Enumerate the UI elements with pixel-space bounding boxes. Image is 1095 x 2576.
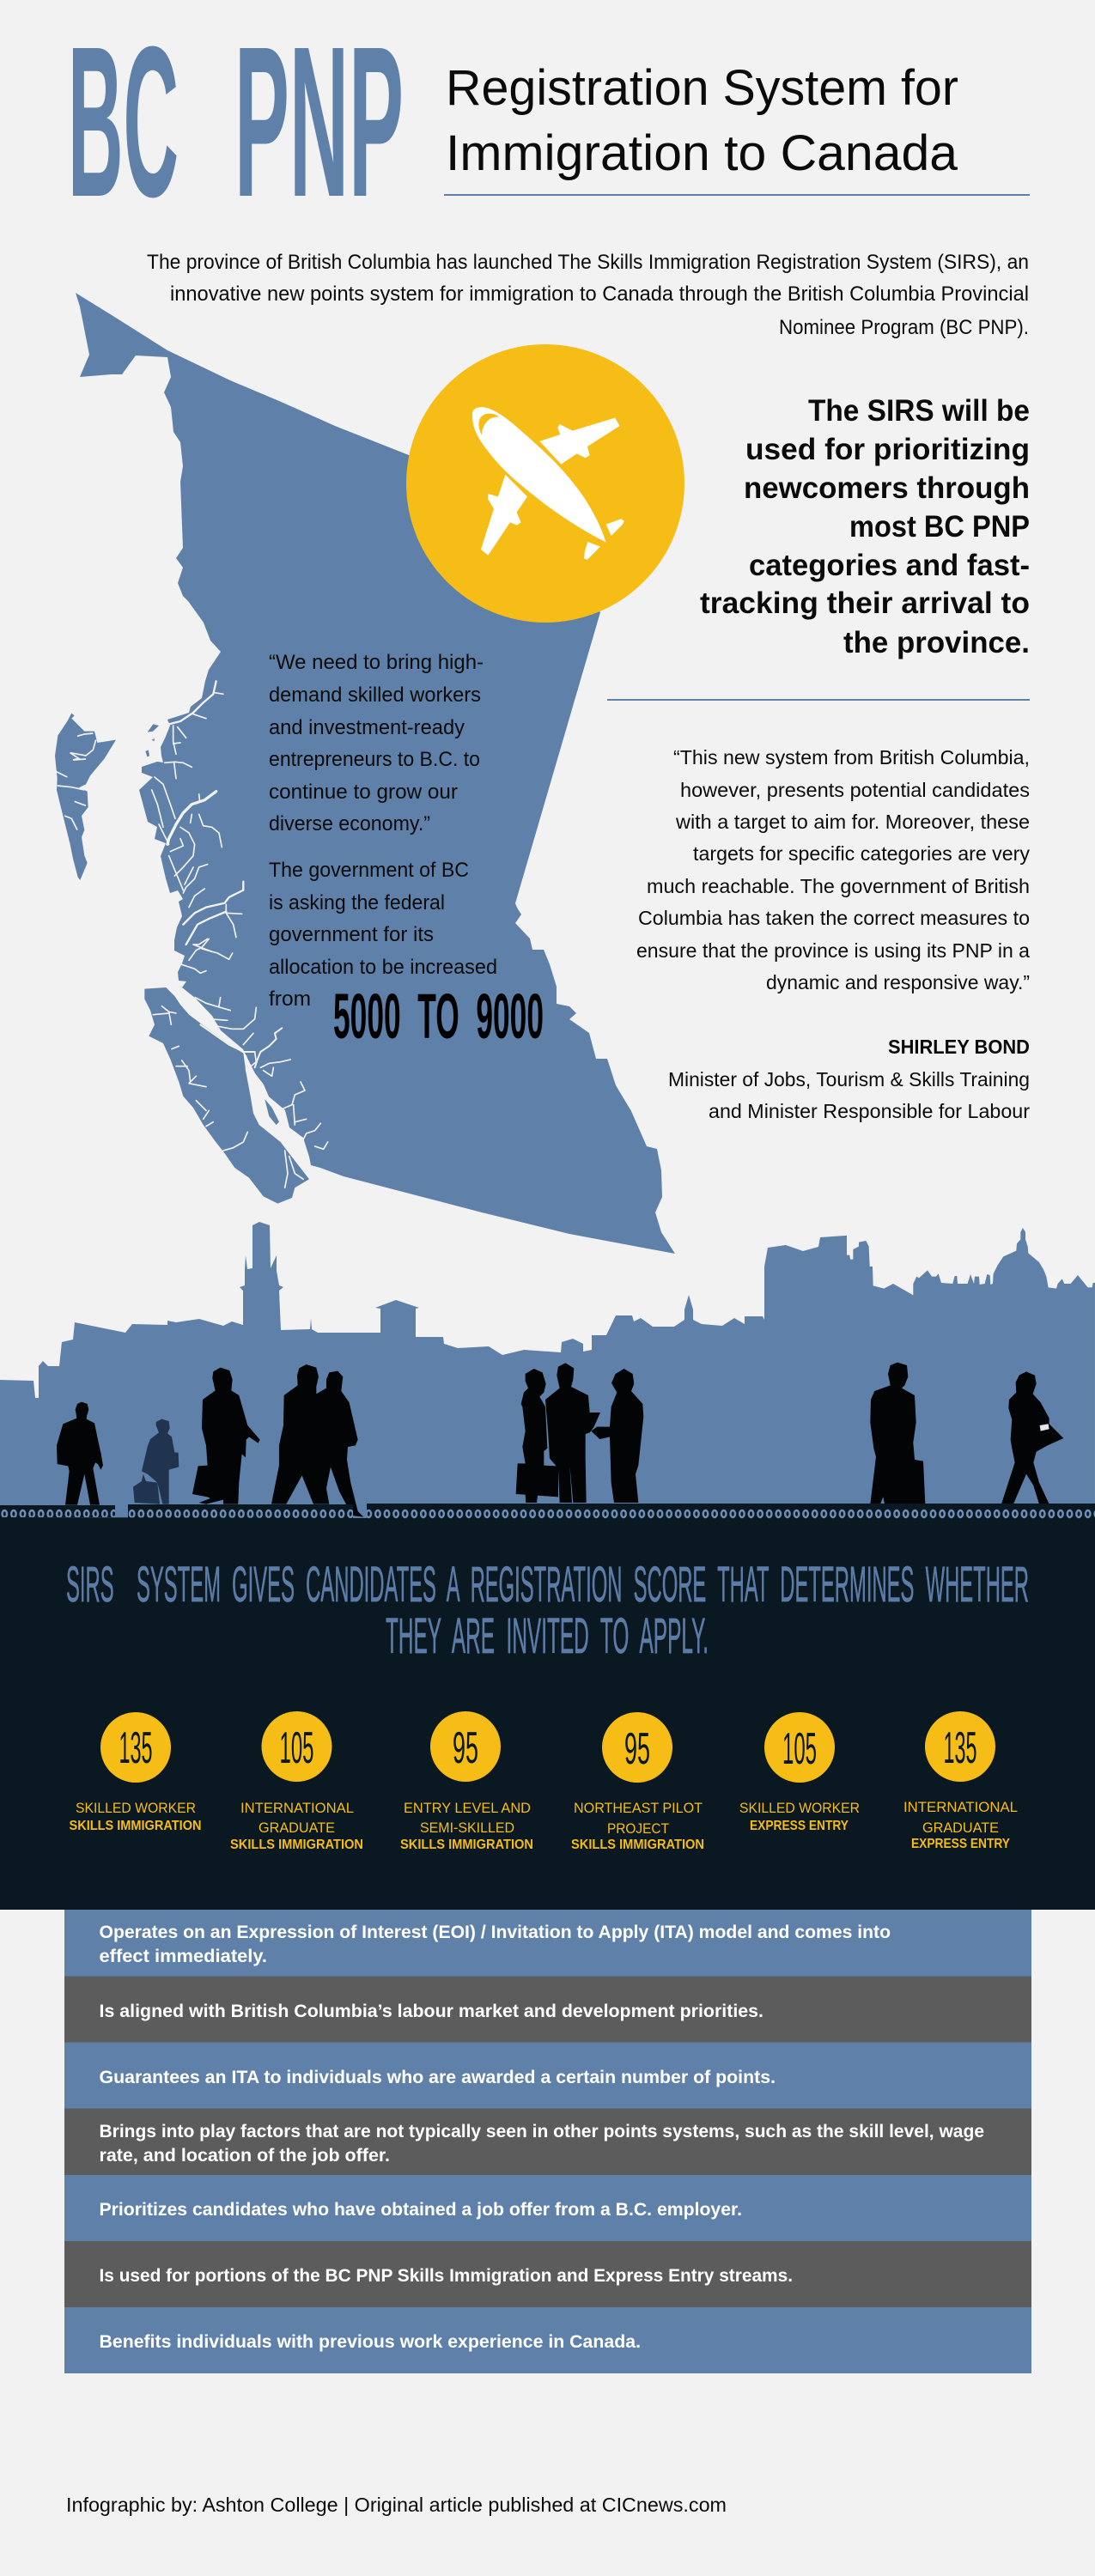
text block: Shirley Bond quote: and Minister Responsible for Labour — [709, 1100, 1030, 1122]
text block: left quote on map: continue to grow our — [269, 781, 458, 804]
score: 135 international graduate express entry: GRADUATE — [922, 1820, 999, 1836]
text block: Shirley Bond quote: “This new system from British Columbia, — [673, 746, 1030, 769]
score: 135 skilled worker skills immigration — [69, 1712, 201, 1833]
text block: Shirley Bond quote — [636, 746, 1031, 1122]
text: PNP — [234, 2, 404, 241]
score: 95 entry level and semi-skilled skills immigration: ENTRY LEVEL AND — [404, 1800, 531, 1816]
feature bar 5: Prioritizes candidates who have obtained a job offer from a B.C. employer. — [100, 2200, 742, 2220]
group: right travellers — [870, 1363, 1063, 1504]
text block: Shirley Bond quote: much reachable. The government of British — [647, 875, 1030, 897]
feature bar 7: Benefits individuals with previous work experience in Canada. — [100, 2332, 641, 2352]
map of British Columbia — [55, 293, 675, 1254]
feature bar 6: Is used for portions of the BC PNP Skills Immigration and Express Entry streams. — [100, 2266, 793, 2286]
subtitle: Registration System for Immigration to Canada — [446, 60, 958, 181]
text block: allocation increase: government for its — [269, 923, 434, 946]
text block: left quote on map: and investment-ready — [269, 716, 465, 739]
score: 105 international graduate skills immigration: 105 — [280, 1723, 314, 1773]
score: 105 skilled worker express entry: 105 — [782, 1724, 817, 1774]
callout: The SIRS will be used: the province. — [843, 626, 1030, 659]
score: 135 skilled worker skills immigration: 135 — [119, 1723, 153, 1773]
text block: Shirley Bond quote: targets for specific categories are very — [693, 842, 1031, 865]
text block: Shirley Bond quote: ensure that the province is using its PNP in a — [636, 939, 1030, 962]
intro text block: The province of British Columbia has launched The Skills Immigration Registration System (SIRS), an — [147, 251, 1029, 274]
feature bar 4: rate, and location of the job offer. — [100, 2146, 390, 2166]
score: 95 northeast pilot project skills immigration: 95 — [624, 1724, 650, 1774]
text block: left quote on map — [269, 651, 484, 835]
callout: The SIRS will be used: used for prioritizing — [745, 433, 1030, 466]
text block: Shirley Bond quote: however, presents potential candidates — [680, 779, 1030, 801]
callout: The SIRS will be used: categories and fast- — [749, 549, 1030, 582]
score: 95 northeast pilot project skills immigration: SKILLS IMMIGRATION — [571, 1838, 704, 1852]
callout: The SIRS will be used: most BC PNP — [849, 510, 1030, 544]
feature bar 7 — [64, 2307, 1031, 2373]
footer credit: Infographic by: Ashton College | Original article published at CICnews.com — [66, 2494, 727, 2516]
score: 105 skilled worker express entry: EXPRESS ENTRY — [750, 1819, 849, 1833]
score: 105 international graduate skills immigration: SKILLS IMMIGRATION — [230, 1838, 363, 1852]
person 10 with handbag — [1001, 1371, 1063, 1504]
score: 105 skilled worker express entry: SKILLED WORKER — [739, 1800, 860, 1816]
score: 95 entry level and semi-skilled skills immigration: 95 — [453, 1723, 478, 1773]
text block: allocation increase: The government of BC — [269, 859, 469, 882]
score: 135 international graduate express entry: INTERNATIONAL — [903, 1799, 1018, 1815]
map: mainland — [76, 293, 675, 1254]
text block: left quote on map: entrepreneurs to B.C. to — [269, 748, 480, 771]
railing — [0, 1504, 1095, 1521]
person 9 with luggage — [870, 1363, 925, 1504]
text block: allocation increase: allocation to be increased — [269, 956, 497, 979]
text block: left quote on map: “We need to bring high- — [269, 651, 484, 674]
text block: left quote on map: demand skilled workers — [269, 683, 481, 707]
map: southern inlets — [153, 939, 328, 1188]
feature bar 4: Brings into play factors that are not typically seen in other points systems, such as the skill level, wage — [100, 2122, 984, 2142]
city skyline — [0, 1222, 1095, 1524]
person 7 — [545, 1363, 600, 1503]
map: small coastal islands — [145, 724, 159, 757]
panel: registration score band — [0, 1517, 1095, 1910]
group: left travellers — [57, 1364, 363, 1517]
score: 95 northeast pilot project skills immigration — [571, 1712, 704, 1852]
person 8 — [591, 1369, 643, 1503]
person 3 with briefcase — [192, 1368, 260, 1504]
feature bar 1: effect immediately. — [100, 1947, 267, 1966]
map: Haida Gwaii — [55, 714, 116, 880]
text block: Shirley Bond quote: Columbia has taken the correct measures to — [638, 907, 1030, 929]
feature bar 2: Is aligned with British Columbia’s labour market and development priorities. — [100, 2002, 763, 2021]
text block: Shirley Bond quote: with a target to aim for. Moreover, these — [675, 811, 1030, 833]
score: 105 skilled worker express entry — [739, 1712, 860, 1833]
heading: score explanation — [66, 1557, 1029, 1664]
callout: The SIRS will be used: tracking their arrival to — [700, 586, 1030, 620]
person 2 with bag — [133, 1419, 179, 1504]
text block: allocation increase: is asking the federal — [269, 891, 445, 914]
text block: allocation increase — [269, 859, 544, 1052]
feature bar 2 — [64, 1977, 1031, 2042]
icon: airplane in yellow circle — [406, 344, 684, 623]
score: 135 international graduate express entry: EXPRESS ENTRY — [911, 1837, 1010, 1851]
score: 135 international graduate express entry — [903, 1711, 1018, 1851]
text block: left quote on map: diverse economy.” — [269, 812, 430, 835]
score: 105 international graduate skills immigration — [230, 1711, 363, 1852]
score: 95 entry level and semi-skilled skills immigration: SKILLS IMMIGRATION — [400, 1838, 533, 1852]
score: 95 entry level and semi-skilled skills immigration — [400, 1711, 533, 1852]
feature bar 1: Operates on an Expression of Interest (EOI) / Invitation to Apply (ITA) model and comes into — [100, 1923, 891, 1942]
map: northern inlets — [152, 681, 243, 951]
map: Texada island — [265, 1099, 279, 1125]
score: 95 entry level and semi-skilled skills immigration: SEMI-SKILLED — [420, 1820, 514, 1836]
text block: Shirley Bond quote: SHIRLEY BOND — [888, 1036, 1030, 1058]
callout: The SIRS will be used: newcomers through — [744, 471, 1030, 505]
subtitle: Registration System for Immigration to Canada: Registration System for — [446, 60, 958, 116]
score: 95 northeast pilot project skills immigration: NORTHEAST PILOT — [574, 1800, 703, 1816]
feature bar 4 — [64, 2109, 1031, 2175]
subtitle: Registration System for Immigration to Canada: Immigration to Canada — [446, 125, 958, 181]
intro text block: innovative new points system for immigration to Canada through the British Columbia Provincial — [170, 283, 1029, 306]
feature bar 3 — [64, 2042, 1031, 2109]
intro text block: Nominee Program (BC PNP). — [779, 316, 1029, 339]
person 1 — [57, 1402, 103, 1505]
text block: Shirley Bond quote: dynamic and responsive way.” — [766, 971, 1030, 993]
text block: allocation increase: from — [269, 987, 311, 1011]
score: 135 skilled worker skills immigration: SKILLED WORKER — [76, 1800, 196, 1816]
group: three people talking — [516, 1363, 643, 1503]
text: 5000 TO 9000 — [333, 981, 544, 1052]
callout: The SIRS will be used — [700, 394, 1030, 659]
score: 105 international graduate skills immigration: INTERNATIONAL — [240, 1800, 354, 1816]
feature bar 1 — [64, 1910, 1031, 1977]
score: 105 international graduate skills immigration: GRADUATE — [259, 1820, 335, 1836]
score: 95 northeast pilot project skills immigration: PROJECT — [607, 1820, 669, 1837]
score: 135 skilled worker skills immigration: SKILLS IMMIGRATION — [69, 1819, 201, 1833]
callout: The SIRS will be used: The SIRS will be — [808, 394, 1030, 428]
intro text block — [147, 251, 1029, 339]
feature bar 6 — [64, 2241, 1031, 2307]
people silhouettes — [57, 1363, 1063, 1517]
feature bar 3: Guarantees an ITA to individuals who are awarded a certain number of points. — [100, 2068, 776, 2087]
person 6 with briefcase — [516, 1369, 558, 1503]
score: 135 international graduate express entry: 135 — [943, 1723, 977, 1773]
title: BC PNP: BC — [68, 2, 179, 241]
panel: SIRS features list — [64, 1910, 1031, 2373]
map: Vancouver Island — [144, 987, 309, 1204]
persons 4 and 5 walking — [271, 1364, 363, 1517]
feature bar 5 — [64, 2175, 1031, 2241]
text block: Shirley Bond quote: Minister of Jobs, Tourism & Skills Training — [668, 1068, 1030, 1091]
